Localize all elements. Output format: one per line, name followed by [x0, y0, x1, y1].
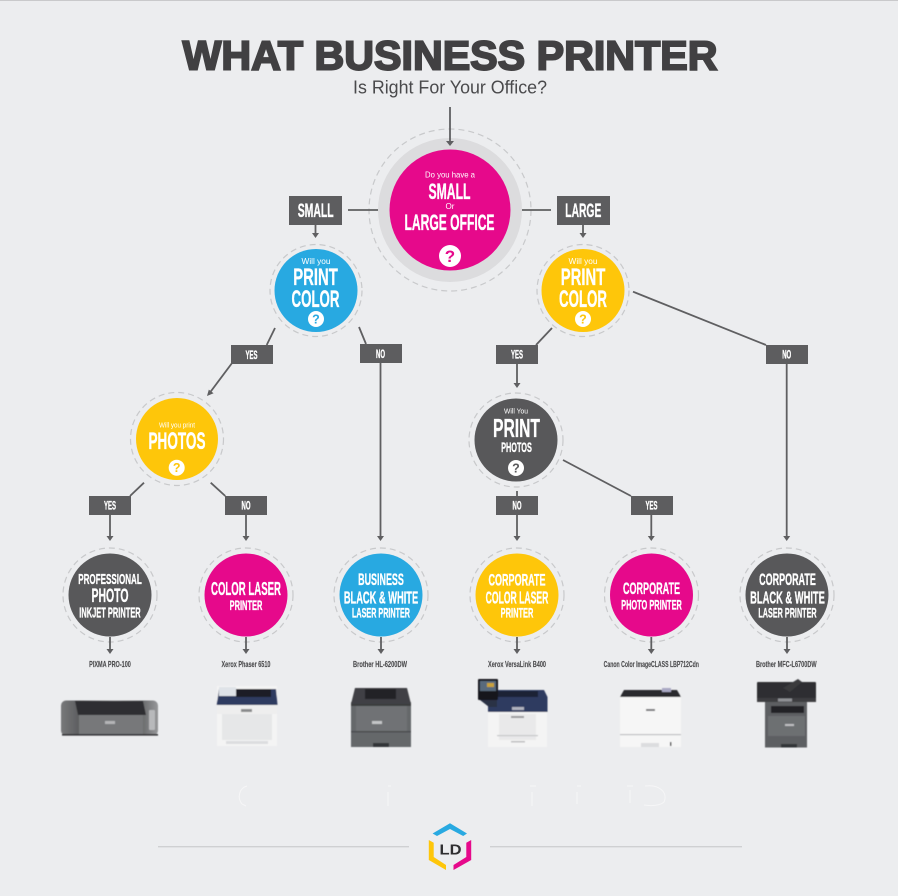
decision: will you print photos: PHOTOS	[501, 439, 532, 455]
decision: will you print photos: ?	[512, 462, 520, 476]
branch: large print color yes: YES	[511, 348, 523, 362]
printer image: Canon Pixma	[61, 700, 158, 736]
decision: large office print color: PRINT	[561, 264, 605, 291]
printer image: Xerox Phaser	[217, 686, 278, 746]
result: professional photo inkjet printer: PROFESSIONAL	[78, 571, 142, 588]
printer image: Brother HL	[351, 688, 411, 747]
decision: small office print color: COLOR	[292, 286, 340, 313]
branch: print photos yes	[563, 460, 673, 541]
decision: small office print color	[270, 244, 362, 336]
result: business black and white laser printer: BUSINESS	[358, 571, 404, 589]
decision: small office print color: Will you	[302, 256, 331, 266]
decision: large office print color	[537, 244, 629, 336]
label: small	[289, 196, 342, 225]
model label: Xerox Phaser 6510: Xerox Phaser 6510	[222, 659, 271, 669]
logo: LD: LD	[440, 842, 462, 858]
result: corporate color laser printer	[470, 548, 564, 654]
result: business black and white laser printer: BLACK & WHITE	[344, 587, 418, 607]
branch: photos yes: YES	[104, 498, 116, 512]
decision: will you print photos: PRINT	[493, 413, 540, 443]
model label: Canon Color ImageCLASS LBP712Cdn: Canon Color ImageCLASS LBP712Cdn	[604, 659, 699, 669]
printer image: Canon ImageCLASS	[620, 688, 681, 747]
arrow: small to print color	[312, 225, 319, 238]
branch: large print color yes	[496, 328, 552, 388]
branch: print photos no	[496, 491, 538, 541]
decision: print photos	[130, 392, 224, 486]
decision: small or large office: ?	[445, 247, 455, 266]
faded white marks	[239, 786, 665, 806]
decision: small or large office	[369, 129, 531, 291]
divider: right	[490, 846, 742, 848]
model label: Xerox VersaLink B400: Xerox VersaLink B400	[488, 659, 546, 669]
branch: small print color yes	[207, 328, 275, 396]
model label: Brother MFC-L6700DW: Brother MFC-L6700DW	[756, 659, 817, 669]
result: business black and white laser printer	[334, 548, 428, 654]
result: color laser printer	[199, 548, 293, 654]
decision: small or large office: SMALL	[428, 179, 470, 204]
connector: office to small	[348, 209, 378, 211]
branch: large print color no: NO	[782, 348, 791, 362]
branch: print photos no: NO	[512, 498, 522, 512]
result: corporate black and white laser printer: BLACK & WHITE	[750, 587, 825, 607]
result: corporate color laser printer: CORPORATE	[488, 572, 546, 590]
branch: small print color yes: YES	[246, 348, 258, 362]
decision: print photos: Will you print	[159, 420, 196, 430]
result: professional photo inkjet printer: PHOTO	[92, 586, 128, 607]
title: WHAT BUSINESS PRINTER	[182, 32, 718, 78]
result: professional photo inkjet printer: INKJET PRINTER	[79, 605, 141, 621]
branch: photos yes	[89, 483, 144, 541]
model label: Brother HL-6200DW: Brother HL-6200DW	[353, 659, 408, 669]
decision: small or large office: Do you have a	[425, 170, 475, 180]
decision: print photos: ?	[173, 461, 181, 475]
decision: will you print photos: Will You	[504, 406, 528, 416]
divider: left	[158, 846, 409, 848]
result: corporate black and white laser printer: CORPORATE	[759, 571, 816, 589]
label: large	[557, 196, 610, 225]
result: corporate photo printer: PHOTO PRINTER	[621, 596, 682, 612]
decision: large office print color: Will you	[568, 256, 598, 266]
decision: will you print photos	[469, 393, 563, 487]
branch: photos no: NO	[242, 498, 250, 512]
result: corporate photo printer: CORPORATE	[623, 580, 680, 598]
decision: small office print color: PRINT	[293, 264, 338, 291]
model label: PIXMA PRO-100: PIXMA PRO-100	[89, 659, 131, 669]
printer image: Brother MFC	[757, 679, 816, 748]
result: corporate color laser printer: COLOR LASER	[486, 587, 549, 607]
result: professional photo inkjet printer	[63, 548, 157, 654]
subtitle: Is Right For Your Office?	[353, 78, 547, 98]
decision: print photos: PHOTOS	[148, 428, 206, 455]
arrow: large to print color	[580, 225, 586, 238]
result: corporate black and white laser printer	[740, 548, 834, 654]
connector: office to large	[522, 209, 551, 211]
result: business black and white laser printer: LASER PRINTER	[352, 604, 410, 620]
result: color laser printer: COLOR LASER	[211, 579, 281, 599]
decision: small or large office: LARGE OFFICE	[404, 210, 494, 235]
arrow: title to start question	[446, 107, 454, 146]
result: color laser printer: PRINTER	[230, 598, 262, 613]
decision: small or large office: Or	[446, 202, 455, 211]
printer image: Xerox VersaLink	[478, 679, 548, 747]
result: corporate photo printer	[604, 548, 698, 654]
decision: large office print color: ?	[579, 312, 587, 326]
branch: small print color no	[359, 327, 402, 541]
decision: large office print color: COLOR	[559, 286, 607, 313]
branch: small print color no: NO	[376, 347, 385, 361]
branch: large print color no	[633, 292, 808, 541]
result: corporate black and white laser printer: LASER PRINTER	[758, 604, 817, 620]
logo: LD	[429, 823, 471, 870]
decision: small office print color: ?	[312, 312, 320, 326]
branch: photos no	[211, 483, 267, 541]
branch: print photos yes: YES	[646, 498, 658, 512]
label: small: SMALL	[298, 200, 334, 222]
label: large: LARGE	[565, 200, 601, 222]
result: corporate color laser printer: PRINTER	[501, 604, 533, 620]
